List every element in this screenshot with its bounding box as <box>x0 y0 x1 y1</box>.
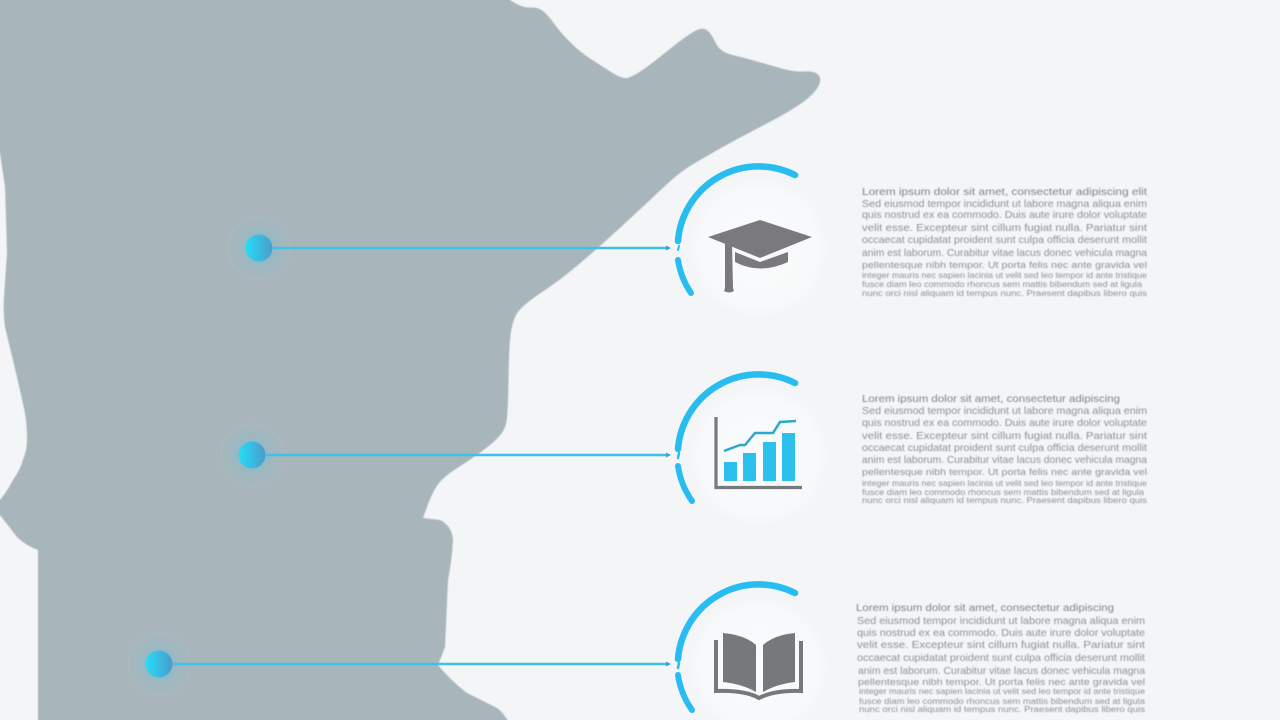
text block 1: integer mauris nec sapien lacinia ut velit sed leo tempor id ante tristique <box>862 270 1147 280</box>
text block 3: anim est laborum. Curabitur vitae lacus donec vehicula magna <box>858 665 1145 677</box>
text block 2: fusce diam leo commodo rhoncus sem mattis bibendum sed at ligula <box>862 488 1145 497</box>
text block 2: quis nostrud ex ea commodo. Duis aute irure dolor voluptate <box>862 417 1147 429</box>
connector line 2 <box>266 452 671 458</box>
text block 2: nunc orci nisl aliquam id tempus nunc. Praesent dapibus libero quis <box>862 496 1147 505</box>
text block 3: nunc orci nisl aliquam id tempus nunc. Praesent dapibus libero quis <box>859 705 1145 714</box>
text block 1: Lorem ipsum dolor sit amet, consectetur adipiscing elit <box>862 186 1147 198</box>
text block 2: pellentesque nibh tempor. Ut porta felis nec ante gravida vel <box>862 467 1147 478</box>
text block 2: occaecat cupidatat proident sunt culpa officia deserunt mollit <box>862 442 1147 454</box>
topic row 3: reading <box>123 584 1146 720</box>
map silhouette <box>0 0 820 720</box>
connector line 1 <box>273 246 671 250</box>
text block 3: fusce diam leo commodo rhoncus sem mattis bibendum sed at ligula <box>859 697 1146 706</box>
text block 1 <box>862 186 1147 298</box>
icon: bar chart with trend line <box>716 417 802 488</box>
text block 3 <box>856 602 1146 714</box>
text block 3: velit esse. Excepteur sint cillum fugiat nulla. Pariatur sint <box>857 639 1145 651</box>
text block 3: Sed eiusmod tempor incididunt ut labore magna aliqua enim <box>857 615 1145 627</box>
hotspot dot 3 <box>123 628 195 700</box>
arc ring 1 <box>678 166 795 293</box>
topic row 1: education <box>223 166 1147 320</box>
text block 2: Lorem ipsum dolor sit amet, consectetur adipiscing <box>862 393 1120 405</box>
arc ring 2 <box>678 374 795 501</box>
hotspot dot 1 <box>223 212 295 284</box>
text block 3: Lorem ipsum dolor sit amet, consectetur adipiscing <box>856 602 1114 614</box>
text block 1: anim est laborum. Curabitur vitae lacus donec vehicula magna <box>862 247 1147 259</box>
text block 2: anim est laborum. Curabitur vitae lacus donec vehicula magna <box>862 454 1147 466</box>
text block 1: pellentesque nibh tempor. Ut porta felis nec ante gravida vel <box>862 260 1147 271</box>
icon disc 3 <box>687 594 831 720</box>
text block 1: nunc orci nisl aliquam id tempus nunc. Praesent dapibus libero quis <box>862 289 1147 298</box>
text block 2: velit esse. Excepteur sint cillum fugiat nulla. Pariatur sint <box>862 430 1147 442</box>
topic row 2: growth <box>216 374 1147 528</box>
text block 3: quis nostrud ex ea commodo. Duis aute irure dolor voluptate <box>857 627 1145 639</box>
icon: open book <box>716 633 801 698</box>
text block 2 <box>862 393 1147 505</box>
text block 1: quis nostrud ex ea commodo. Duis aute irure dolor voluptate <box>862 209 1147 221</box>
text block 3: integer mauris nec sapien lacinia ut velit sed leo tempor id ante tristique <box>859 686 1145 696</box>
connector line 3 <box>173 662 671 666</box>
text block 2: Sed eiusmod tempor incididunt ut labore magna aliqua enim <box>862 405 1147 417</box>
text block 1: velit esse. Excepteur sint cillum fugiat nulla. Pariatur sint <box>862 222 1147 234</box>
icon: graduation cap <box>708 220 812 292</box>
text block 3: occaecat cupidatat proident sunt culpa officia deserunt mollit <box>857 652 1145 664</box>
text block 2: integer mauris nec sapien lacinia ut velit sed leo tempor id ante tristique <box>862 478 1147 488</box>
text block 1: fusce diam leo commodo rhoncus sem mattis bibendum sed at ligula <box>862 280 1143 289</box>
icon disc 2 <box>687 384 831 528</box>
arc ring 3 <box>678 584 795 710</box>
icon disc 1 <box>687 176 831 320</box>
text block 1: occaecat cupidatat proident sunt culpa officia deserunt mollit <box>862 234 1147 246</box>
text block 3: pellentesque nibh tempor. Ut porta felis nec ante gravida vel <box>858 677 1145 688</box>
text block 1: Sed eiusmod tempor incididunt ut labore magna aliqua enim <box>862 198 1147 210</box>
hotspot dot 2 <box>216 419 288 491</box>
